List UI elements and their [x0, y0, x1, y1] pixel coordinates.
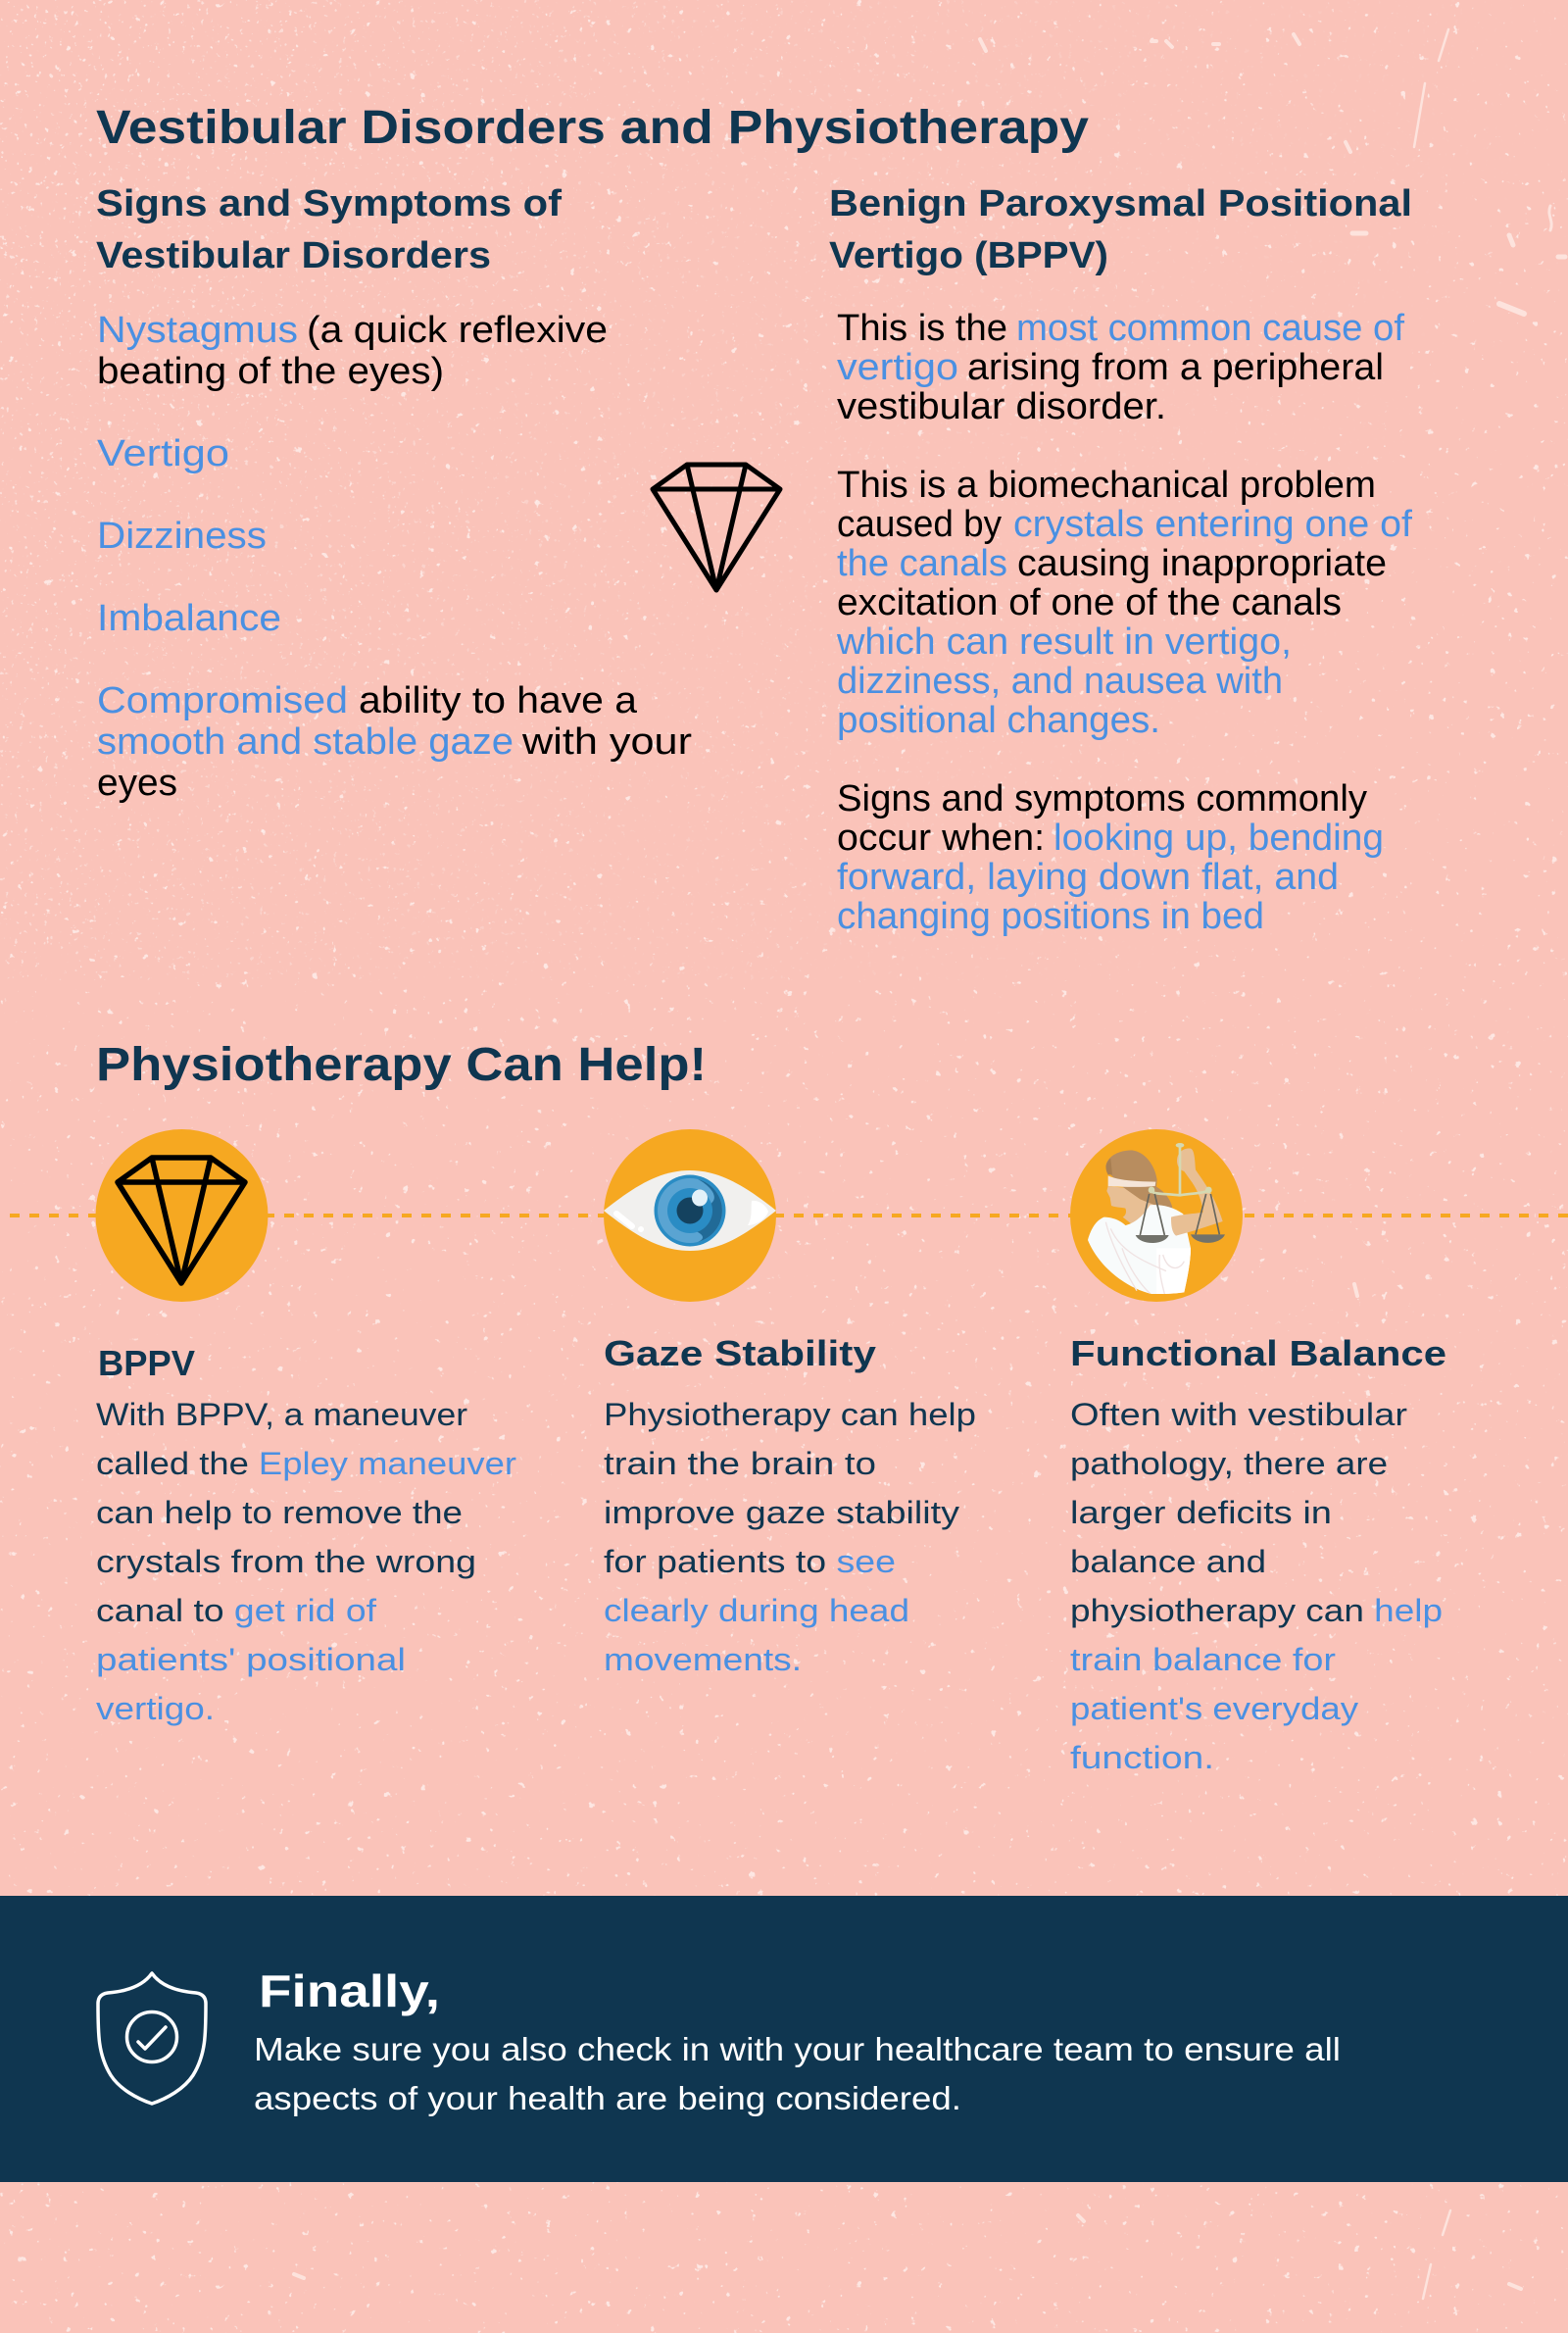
text block: clearly during head	[604, 1593, 909, 1628]
text: BPPV description: changing positions in bed	[837, 896, 1264, 937]
text: symptom list: eyes	[97, 763, 177, 804]
text: symptom list: Nystagmus	[97, 310, 298, 351]
text: BPPV description: crystals entering one of	[1013, 504, 1412, 545]
text block: called the Epley maneuver	[96, 1446, 516, 1481]
heading: finally: Finally,	[259, 1965, 440, 2016]
heading: signs and symptoms	[96, 183, 562, 276]
panel: functional balance	[1070, 1333, 1446, 1775]
text: BPPV description: vestibular disorder.	[837, 386, 1166, 427]
text: BPPV description: positional changes.	[837, 700, 1160, 741]
text: symptom list: (a quick reflexive	[307, 310, 608, 351]
heading: Functional Balance	[1070, 1333, 1446, 1373]
text block: larger deficits in	[1070, 1495, 1332, 1530]
text block: improve gaze stability	[604, 1495, 959, 1530]
heading: physiotherapy can help: Physiotherapy Can Help!	[96, 1039, 707, 1091]
text: symptom list: with your	[521, 721, 692, 763]
text: symptom list: smooth and stable gaze	[97, 721, 514, 763]
text block: Physiotherapy can help	[604, 1397, 976, 1432]
text block: physiotherapy can help	[1070, 1593, 1443, 1628]
text: BPPV description: which can result in vertigo,	[836, 621, 1292, 663]
text block: pathology, there are	[1070, 1446, 1388, 1481]
text: BPPV description: forward, laying down flat, and	[837, 857, 1339, 898]
text: BPPV description: Signs and symptoms commonly	[837, 778, 1367, 819]
text block: crystals from the wrong	[96, 1544, 476, 1579]
text block: vertigo.	[96, 1691, 215, 1726]
text: check in	[254, 2031, 1341, 2116]
text block	[1070, 1397, 1443, 1775]
text block: function.	[1070, 1740, 1214, 1775]
heading: Gaze Stability	[604, 1333, 876, 1373]
panel: signs and symptoms	[96, 183, 692, 804]
text: symptom list	[97, 310, 692, 804]
text block: patient's everyday	[1070, 1691, 1358, 1726]
dashed connector line	[10, 1214, 1568, 1217]
panel: finally banner	[0, 1896, 1568, 2182]
text: BPPV description: This is a biomechanical problem	[837, 465, 1376, 506]
text: symptom list: Compromised	[97, 680, 348, 721]
text: symptom list: beating of the eyes)	[97, 351, 444, 392]
panel: BPPV	[829, 183, 1412, 937]
icon: eye in orange circle	[604, 1129, 776, 1302]
icon: lady justice in orange circle	[1070, 1129, 1243, 1302]
heading: signs and symptoms: Vestibular Disorders	[96, 235, 491, 276]
text block	[96, 1397, 516, 1726]
heading: BPPV: Vertigo (BPPV)	[829, 235, 1108, 276]
title: Vestibular Disorders and Physiotherapy	[96, 102, 1089, 154]
text: BPPV description: occur when:	[837, 818, 1045, 859]
text block: patients' positional	[96, 1642, 406, 1677]
text block: train balance for	[1070, 1642, 1336, 1677]
text block: train the brain to	[604, 1446, 876, 1481]
heading: BPPV	[98, 1343, 195, 1383]
text: check in: aspects of your health are being considered.	[254, 2080, 961, 2116]
text: BPPV description: arising from a peripheral	[967, 347, 1384, 388]
text: BPPV description: causing inappropriate	[1017, 543, 1387, 584]
text: symptom list: ability to have a	[359, 680, 638, 721]
text block	[604, 1397, 976, 1677]
panel: BPPV treatment	[96, 1343, 516, 1726]
text block: can help to remove the	[96, 1495, 463, 1530]
text: BPPV description	[836, 308, 1412, 937]
heading: BPPV: Benign Paroxysmal Positional	[829, 183, 1412, 224]
icon: diamond in orange circle	[96, 1129, 269, 1302]
panel: gaze stability	[604, 1333, 976, 1677]
text block: movements.	[604, 1642, 802, 1677]
text block: balance and	[1070, 1544, 1266, 1579]
text: symptom list: Imbalance	[97, 598, 281, 639]
text: BPPV description: the canals	[837, 543, 1007, 584]
text: BPPV description: This is the	[837, 308, 1007, 349]
text block: With BPPV, a maneuver	[96, 1397, 467, 1432]
icon: diamond	[653, 465, 780, 590]
text: BPPV description: looking up, bending	[1054, 818, 1384, 859]
text: BPPV description: most common cause of	[1016, 308, 1404, 349]
text block: Often with vestibular	[1070, 1397, 1407, 1432]
text block: for patients to see	[604, 1544, 896, 1579]
text: BPPV description: excitation of one of the canals	[837, 582, 1342, 623]
text: symptom list: Dizziness	[97, 516, 267, 557]
text block: canal to get rid of	[96, 1593, 376, 1628]
icon: shield with check	[98, 1973, 206, 2104]
heading: signs and symptoms: Signs and Symptoms of	[96, 183, 562, 224]
heading: BPPV	[829, 183, 1412, 276]
text: symptom list: Vertigo	[97, 433, 229, 474]
text: BPPV description: dizziness, and nausea with	[837, 661, 1283, 702]
text: check in: Make sure you also check in with your healthcare team to ensure all	[254, 2031, 1341, 2067]
text: BPPV description: caused by	[837, 504, 1002, 545]
text: BPPV description: vertigo	[837, 347, 958, 388]
